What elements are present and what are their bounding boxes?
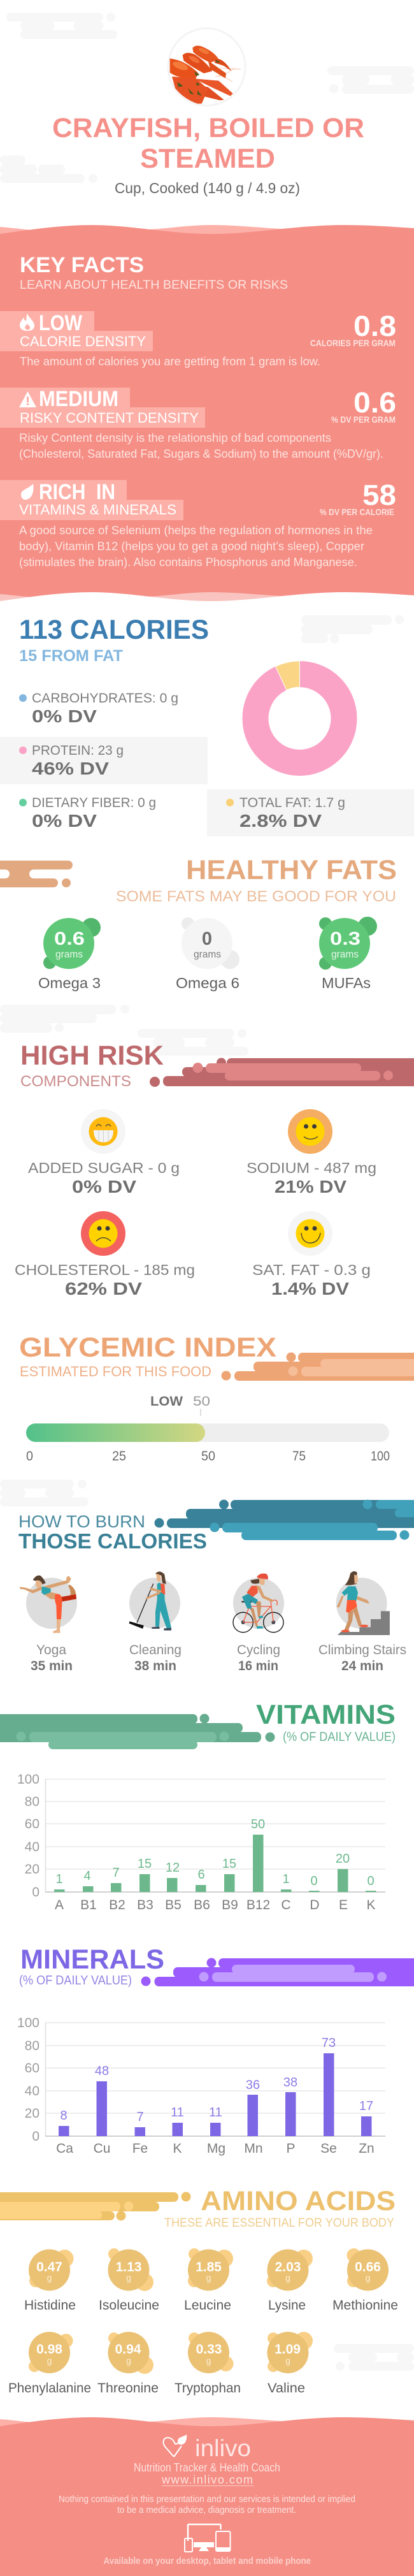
logo: inlivo [163, 2434, 251, 2461]
vitamins bar chart: 80 [25, 1794, 39, 1809]
panel: healthy fats [0, 855, 397, 991]
amino row 1 names [24, 2298, 398, 2313]
fact: low calorie density: LOW [39, 311, 83, 335]
key facts heading: LEARN ABOUT HEALTH BENEFITS OR RISKS [20, 279, 288, 292]
legend: protein: 46% DV [32, 759, 109, 778]
glycemic scale labels: 75 [292, 1449, 306, 1464]
healthy fats heading: SOME FATS MAY BE GOOD FOR YOU [116, 888, 396, 905]
panel: key facts [0, 225, 414, 615]
minerals bar chart: 60 [25, 2061, 39, 2076]
high risk heading: COMPONENTS [20, 1073, 131, 1090]
legend: dietary fiber [19, 796, 156, 831]
glycemic heading: GLYCEMIC INDEX [19, 1332, 276, 1363]
fact: rich in vitamins and minerals: A good source of Selenium (helps the regulation of hormones in the [19, 524, 373, 537]
amino row 2 names: Tryptophan [175, 2381, 241, 2396]
vitamins heading: (% OF DAILY VALUE) [283, 1730, 396, 1744]
burn heading: HOW TO BURN [18, 1512, 145, 1531]
minerals bar chart: Fe [132, 2141, 148, 2156]
minerals bar chart: 11 [209, 2106, 222, 2120]
minerals heading: (% OF DAILY VALUE) [19, 1974, 132, 1988]
glycemic heading: ESTIMATED FOR THIS FOOD [20, 1364, 211, 1379]
badge: omega 6: grams [194, 949, 221, 960]
fact: low calorie density [0, 310, 396, 368]
logo: inlivo: inlivo [195, 2435, 251, 2461]
vitamins bar chart: K [366, 1898, 376, 1912]
risk item: sodium: SODIUM - 487 mg [246, 1160, 376, 1176]
badge: MUFAs: grams [331, 949, 359, 960]
risk item: added sugar [28, 1109, 180, 1197]
minerals bar chart: K [173, 2141, 182, 2156]
activity: cycling: 16 min [238, 1659, 278, 1673]
legend: total fat [226, 796, 345, 831]
fact: rich in vitamins and minerals: (stimulates the brain). Also contains Phosphorus and Manganese. [19, 556, 357, 569]
risk item: cholesterol [15, 1211, 195, 1299]
activity: climbing stairs [318, 1571, 406, 1673]
minerals bar chart [17, 2016, 385, 2156]
activity: yoga [20, 1575, 77, 1673]
legend: carbohydrates: 0% DV [32, 706, 97, 726]
minerals bar chart: P [286, 2141, 296, 2156]
amino row 2 names: Phenylalanine [8, 2381, 91, 2396]
legend: dietary fiber: DIETARY FIBER: 0 g [32, 796, 156, 810]
amino row 1 values: g [47, 2273, 52, 2283]
minerals bar chart: 8 [60, 2109, 68, 2123]
minerals ribbon [141, 1958, 414, 1986]
panel: amino acids [0, 2186, 398, 2396]
legend: protein [19, 743, 124, 778]
minerals heading: MINERALS [20, 1944, 164, 1975]
badge: omega 6 [176, 917, 239, 991]
legend: carbohydrates: CARBOHYDRATES: 0 g [32, 691, 178, 706]
risk item: sodium [246, 1109, 376, 1197]
minerals bar chart: 7 [136, 2110, 144, 2124]
activity: cleaning: 38 min [134, 1659, 176, 1673]
minerals bar chart: 17 [359, 2099, 373, 2113]
glycemic value marker: LOW [150, 1394, 183, 1409]
risk item: added sugar: ADDED SUGAR - 0 g [28, 1160, 180, 1176]
disclaimer: Nothing contained in this presentation and our services is intended or implied [59, 2494, 355, 2505]
fact: rich in vitamins and minerals: % DV PER CALORIE [320, 507, 394, 517]
activity: climbing stairs: 24 min [341, 1659, 383, 1673]
badge: MUFAs: 0.3 [330, 929, 360, 949]
fact: medium risky content density: % DV PER GRAM [331, 414, 396, 425]
macronutrient donut chart [255, 661, 344, 762]
vitamins ribbon [0, 1714, 275, 1749]
amino row 2 values: g [126, 2355, 131, 2366]
amino row 2 names: Valine [268, 2381, 305, 2396]
badge: omega 6: 0 [202, 929, 212, 949]
amino acids heading: AMINO ACIDS [201, 2186, 396, 2216]
risk item: added sugar: 0% DV [72, 1177, 136, 1197]
panel: footer [0, 2417, 414, 2576]
amino row 2 values: g [206, 2355, 211, 2366]
minerals bar chart: 20 [25, 2106, 39, 2121]
amino row 2 values: 0.94 [115, 2342, 141, 2357]
fact: low calorie density: CALORIE DENSITY [20, 333, 146, 349]
title: STEAMED [140, 143, 275, 174]
vitamins bar chart: 100 [17, 1772, 39, 1787]
vitamins bar chart: 40 [25, 1840, 39, 1854]
badge: MUFAs: MUFAs [322, 975, 371, 991]
amino bubbles back layer [29, 2248, 360, 2374]
key facts heading: KEY FACTS [20, 253, 144, 277]
fact: medium risky content density: (Cholesterol, Saturated Fat, Sugars & Sodium) to the amount (%DV/gr). [19, 448, 383, 460]
amino row 1 values: g [366, 2273, 370, 2283]
amino row 1 values: g [126, 2273, 131, 2283]
minerals bar chart: 80 [25, 2039, 39, 2053]
amino row 2 values [36, 2342, 301, 2366]
amino row 1 values: g [206, 2273, 211, 2283]
legend: total fat: TOTAL FAT: 1.7 g [239, 796, 345, 810]
burn ribbon [154, 1499, 414, 1540]
amino acids heading: THESE ARE ESSENTIAL FOR YOUR BODY [164, 2216, 394, 2230]
activity: cycling [233, 1573, 284, 1673]
amino row 2 names: Threonine [97, 2381, 159, 2396]
amino row 2 values: g [47, 2355, 52, 2366]
badge: MUFAs [319, 917, 377, 991]
badge: omega 3: Omega 3 [38, 975, 101, 991]
panel: high risk components [15, 1040, 414, 1299]
panel: calories [0, 615, 414, 836]
fact: rich in vitamins and minerals: RICH IN [39, 480, 115, 504]
risk item: cholesterol: CHOLESTEROL - 185 mg [15, 1262, 195, 1278]
panel: vitamins [0, 1699, 396, 1912]
activity: cleaning: Cleaning [129, 1643, 182, 1657]
minerals bar chart: 48 [95, 2064, 109, 2078]
minerals bar chart: 38 [283, 2076, 297, 2090]
badge: omega 6: Omega 6 [176, 975, 239, 991]
glycemic heading [19, 1332, 276, 1379]
vitamins bar chart: 15 [222, 1857, 236, 1871]
vitamins bar chart: B5 [165, 1898, 182, 1912]
amino row 1 names: Lysine [268, 2298, 306, 2313]
vitamins bar chart: 50 [251, 1817, 265, 1831]
panel: how to burn those calories [18, 1499, 414, 1673]
vitamins bar chart: 20 [336, 1852, 350, 1866]
fact: low calorie density: CALORIES PER GRAM [310, 338, 396, 348]
vitamins bar chart: 0 [310, 1874, 318, 1888]
glycemic scale labels: 25 [112, 1449, 126, 1464]
panel: minerals [17, 1944, 414, 2156]
footer tagline and site: www.inlivo.com [161, 2473, 253, 2486]
minerals bar chart: 36 [246, 2078, 260, 2092]
minerals bar chart: 100 [17, 2016, 39, 2030]
amino row 2 values: g [285, 2355, 290, 2366]
amino row 1 names: Histidine [24, 2298, 76, 2313]
amino discs [29, 2249, 389, 2373]
food photo: crayfish in circle [168, 28, 245, 106]
availability note: Available on your desktop, tablet and mobile phone [103, 2556, 311, 2566]
vitamins bar chart [17, 1772, 385, 1912]
fact: rich in vitamins and minerals: VITAMINS & MINERALS [19, 502, 176, 518]
calories heading: 113 CALORIES [19, 615, 209, 645]
amino acids heading [164, 2186, 396, 2230]
high risk heading: HIGH RISK [20, 1040, 164, 1071]
activity: cleaning [129, 1571, 182, 1673]
minerals bar chart: 11 [171, 2106, 184, 2120]
high risk heading [20, 1040, 164, 1090]
amino row 1 values: 0.47 [36, 2260, 62, 2274]
fact: rich in vitamins and minerals: body), Vitamin B12 (helps you to get a good night’s sleep), Copper [19, 540, 364, 553]
healthy fats ribbon [0, 861, 73, 887]
disclaimer [59, 2494, 355, 2515]
risk item: saturated fat: SAT. FAT - 0.3 g [252, 1262, 371, 1278]
legend: dietary fiber: 0% DV [32, 811, 97, 831]
badge: omega 3: 0.6 [54, 929, 85, 949]
icon: devices [185, 2524, 231, 2552]
minerals bar chart: Cu [94, 2141, 110, 2156]
healthy fats heading: HEALTHY FATS [186, 855, 397, 885]
fact: low calorie density: The amount of calories you are getting from 1 gram is low. [20, 355, 320, 368]
vitamins bar chart: B9 [222, 1898, 238, 1912]
amino row 1 values: 1.85 [196, 2260, 222, 2274]
minerals bar chart: Ca [56, 2141, 73, 2156]
title: CRAYFISH, BOILED OR [52, 113, 364, 143]
vitamins bar chart: 12 [166, 1861, 180, 1875]
vitamins bar chart: B12 [246, 1898, 270, 1912]
glycemic ribbon [222, 1353, 414, 1381]
vitamins bar chart: 0 [32, 1885, 39, 1900]
vitamins bar chart: 6 [197, 1868, 205, 1882]
fact: medium risky content density: Risky Content density is the relationship of bad components [19, 432, 331, 444]
title [52, 113, 364, 174]
amino row 1 values [36, 2260, 381, 2283]
vitamins heading: VITAMINS [256, 1699, 396, 1730]
risk item: sodium: 21% DV [275, 1177, 346, 1197]
vitamins bar chart: 60 [25, 1817, 39, 1831]
amino row 2 values: 0.98 [36, 2342, 62, 2357]
vitamins bar chart: 1 [55, 1872, 63, 1886]
badge: omega 3 [38, 918, 101, 991]
minerals heading [19, 1944, 164, 1988]
fact: rich in vitamins and minerals [0, 479, 396, 569]
glycemic value marker [150, 1394, 210, 1416]
minerals bar chart: Se [320, 2141, 337, 2156]
vitamins bar chart: B2 [109, 1898, 125, 1912]
vitamins bar chart: 0 [367, 1874, 375, 1888]
serving size: Cup, Cooked (140 g / 4.9 oz) [115, 180, 300, 196]
minerals bar chart: 73 [322, 2036, 336, 2050]
vitamins bar chart: C [281, 1898, 291, 1912]
vitamins bar chart: 15 [138, 1857, 152, 1871]
burn heading: THOSE CALORIES [18, 1529, 207, 1553]
fact: low calorie density: 0.8 [353, 310, 396, 342]
calories heading [19, 615, 209, 665]
amino row 2 values: 1.09 [275, 2342, 301, 2357]
activity: yoga: Yoga [36, 1643, 66, 1657]
risk item: saturated fat [252, 1211, 371, 1299]
activity: climbing stairs: Climbing Stairs [318, 1643, 406, 1657]
fact: rich in vitamins and minerals: 58 [362, 479, 396, 511]
legend: carbohydrates [19, 691, 178, 726]
disclaimer: to be a medical advice, diagnosis or treatment. [117, 2505, 296, 2515]
amino row 1 values: 0.66 [355, 2260, 381, 2274]
fact: medium risky content density: 0.6 [353, 386, 396, 419]
amino acids ribbon [0, 2192, 191, 2221]
footer tagline and site [134, 2461, 280, 2486]
amino row 1 values: 1.13 [116, 2260, 141, 2274]
amino row 2 names [8, 2381, 305, 2396]
vitamins bar chart: 1 [282, 1872, 290, 1886]
vitamins heading [256, 1699, 396, 1744]
vitamins bar chart: D [310, 1898, 320, 1912]
vitamins bar chart: 4 [83, 1869, 91, 1883]
vitamins bar chart: 7 [112, 1866, 120, 1880]
glycemic scale labels [26, 1449, 390, 1464]
minerals bar chart: Mn [244, 2141, 263, 2156]
minerals bar chart: 40 [25, 2084, 39, 2099]
amino row 1 values: g [285, 2273, 290, 2283]
risk item: saturated fat: 1.4% DV [271, 1279, 349, 1299]
glycemic value marker: 50 [193, 1394, 210, 1409]
burn heading [18, 1512, 207, 1553]
minerals bar chart: 0 [32, 2129, 39, 2144]
vitamins bar chart: E [339, 1898, 348, 1912]
activity: cycling: Cycling [237, 1643, 280, 1657]
minerals bar chart: Mg [207, 2141, 225, 2156]
fact: medium risky content density: RISKY CONTENT DENSITY [20, 410, 199, 426]
glycemic scale labels: 0 [26, 1449, 33, 1464]
healthy fats heading [116, 855, 397, 905]
panel: glycemic index [19, 1332, 414, 1464]
high risk ribbon [150, 1058, 414, 1087]
calories heading: 15 FROM FAT [19, 647, 123, 665]
vitamins bar chart: B6 [194, 1898, 210, 1912]
legend: protein: PROTEIN: 23 g [32, 743, 124, 758]
minerals bar chart: Zn [359, 2141, 375, 2156]
badge: omega 3: grams [55, 949, 83, 960]
footer tagline and site: Nutrition Tracker & Health Coach [134, 2461, 280, 2474]
fact: medium risky content density [0, 386, 396, 460]
vitamins bar chart: B1 [80, 1898, 97, 1912]
risk item: cholesterol: 62% DV [65, 1279, 142, 1299]
amino row 1 names: Isoleucine [99, 2298, 159, 2313]
glycemic scale labels: 100 [371, 1449, 390, 1464]
amino row 1 values: 2.03 [275, 2260, 301, 2274]
vitamins bar chart: A [55, 1898, 64, 1912]
legend: total fat: 2.8% DV [239, 811, 322, 831]
activity: yoga: 35 min [31, 1659, 73, 1673]
fact: medium risky content density: MEDIUM [39, 387, 118, 411]
vitamins bar chart: 20 [25, 1862, 39, 1877]
amino row 1 names: Leucine [184, 2298, 231, 2313]
glycemic scale labels: 50 [201, 1449, 215, 1464]
glycemic gauge bar [26, 1423, 389, 1442]
key facts heading [20, 253, 288, 292]
amino row 2 values: 0.33 [196, 2342, 222, 2357]
amino row 1 names: Methionine [332, 2298, 398, 2313]
vitamins bar chart: B3 [137, 1898, 153, 1912]
